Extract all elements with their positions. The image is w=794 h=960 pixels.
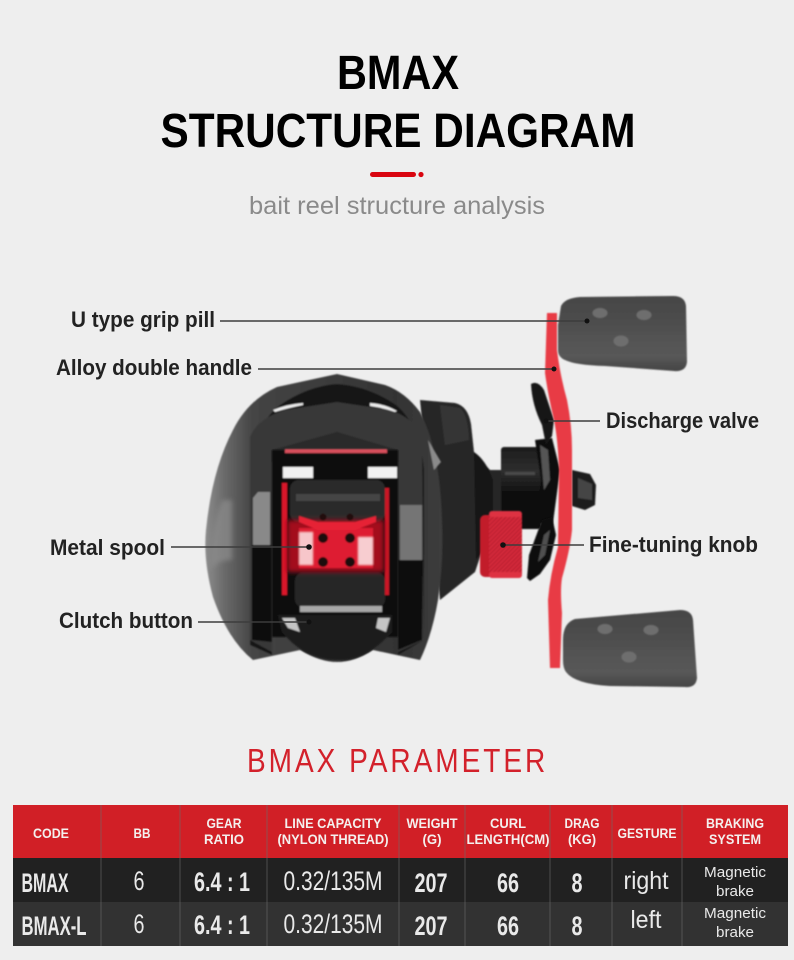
- top grip knob: [558, 296, 687, 371]
- callout: Alloy double handle: [56, 355, 556, 380]
- reel product illustration: [205, 296, 697, 687]
- row: BMAX-L: BMAX-L: [22, 911, 86, 941]
- table header row: (G): [422, 831, 442, 847]
- table header row: LINE CAPACITY: [284, 815, 382, 831]
- release levers: [527, 383, 556, 581]
- parameter table: [13, 805, 788, 946]
- row: BMAX-L: 66: [497, 911, 519, 941]
- red handle arm: [545, 313, 572, 668]
- callout: Discharge valve: Discharge valve: [606, 408, 759, 433]
- row: BMAX: right: [624, 867, 669, 895]
- table header row: DRAG: [564, 815, 600, 831]
- title: BMAX: [337, 47, 459, 100]
- bottom grip knob: [563, 610, 697, 687]
- parameter heading: BMAX PARAMETER: [247, 743, 548, 780]
- frame window and spool: [272, 449, 398, 660]
- table header row: GEAR: [206, 815, 242, 831]
- row: BMAX: 66: [497, 868, 519, 898]
- table header row: RATIO: [204, 831, 244, 847]
- row: BMAX: Magnetic: [704, 865, 766, 881]
- row: BMAX: 6.4 : 1: [194, 867, 250, 897]
- row: BMAX: 6: [134, 866, 144, 896]
- table header row: SYSTEM: [709, 831, 761, 847]
- callout: U type grip pill: U type grip pill: [71, 307, 215, 332]
- reel main body: [205, 374, 442, 662]
- callout: U type grip pill: [71, 307, 590, 332]
- callout: Clutch button: [59, 608, 312, 633]
- row: BMAX-L: 0.32/135M: [284, 909, 382, 939]
- callout: Metal spool: Metal spool: [50, 535, 165, 560]
- table header row: CURL: [490, 815, 526, 831]
- row: BMAX-L: [22, 906, 766, 941]
- table header row: CODE: [33, 825, 69, 841]
- row: BMAX: 8: [572, 868, 582, 898]
- table header row: WEIGHT: [406, 815, 458, 831]
- row: BMAX: brake: [716, 884, 754, 900]
- row: BMAX: BMAX: [22, 868, 68, 898]
- axle nut: [572, 470, 596, 510]
- row: BMAX: 207: [414, 868, 448, 898]
- row: BMAX: [22, 865, 766, 900]
- title: STRUCTURE DIAGRAM: [160, 105, 636, 158]
- callout: Clutch button: Clutch button: [59, 608, 193, 633]
- row: BMAX-L: left: [630, 906, 662, 934]
- clutch button: [278, 615, 392, 660]
- row: BMAX-L: 6: [134, 909, 144, 939]
- title: [160, 47, 636, 158]
- callout: Alloy double handle: Alloy double handle: [56, 355, 252, 380]
- table header row: BRAKING: [706, 815, 764, 831]
- row: BMAX-L: 207: [414, 911, 448, 941]
- table header row: BB: [134, 825, 150, 841]
- table header row: (NYLON THREAD): [278, 831, 388, 847]
- table header row: GESTURE: [618, 825, 676, 841]
- callout: Discharge valve: [544, 408, 759, 433]
- reel side plate and axle: [420, 400, 596, 600]
- table header row: [13, 805, 788, 858]
- callout: Fine-tuning knob: [500, 532, 758, 557]
- row: BMAX-L: 6.4 : 1: [194, 910, 250, 940]
- subtitle: bait reel structure analysis: [249, 192, 545, 220]
- row: BMAX: 0.32/135M: [284, 866, 382, 896]
- red accent divider: [370, 172, 424, 177]
- callout: Metal spool: [50, 535, 312, 560]
- table header row: LENGTH(CM): [466, 831, 550, 847]
- table header row: (KG): [568, 831, 596, 847]
- row: BMAX-L: Magnetic: [704, 906, 766, 922]
- callout: Fine-tuning knob: Fine-tuning knob: [589, 532, 758, 557]
- table rows: [13, 858, 788, 902]
- row: BMAX-L: brake: [716, 925, 754, 941]
- fine-tuning knob: [480, 511, 522, 578]
- row: BMAX-L: 8: [572, 911, 582, 941]
